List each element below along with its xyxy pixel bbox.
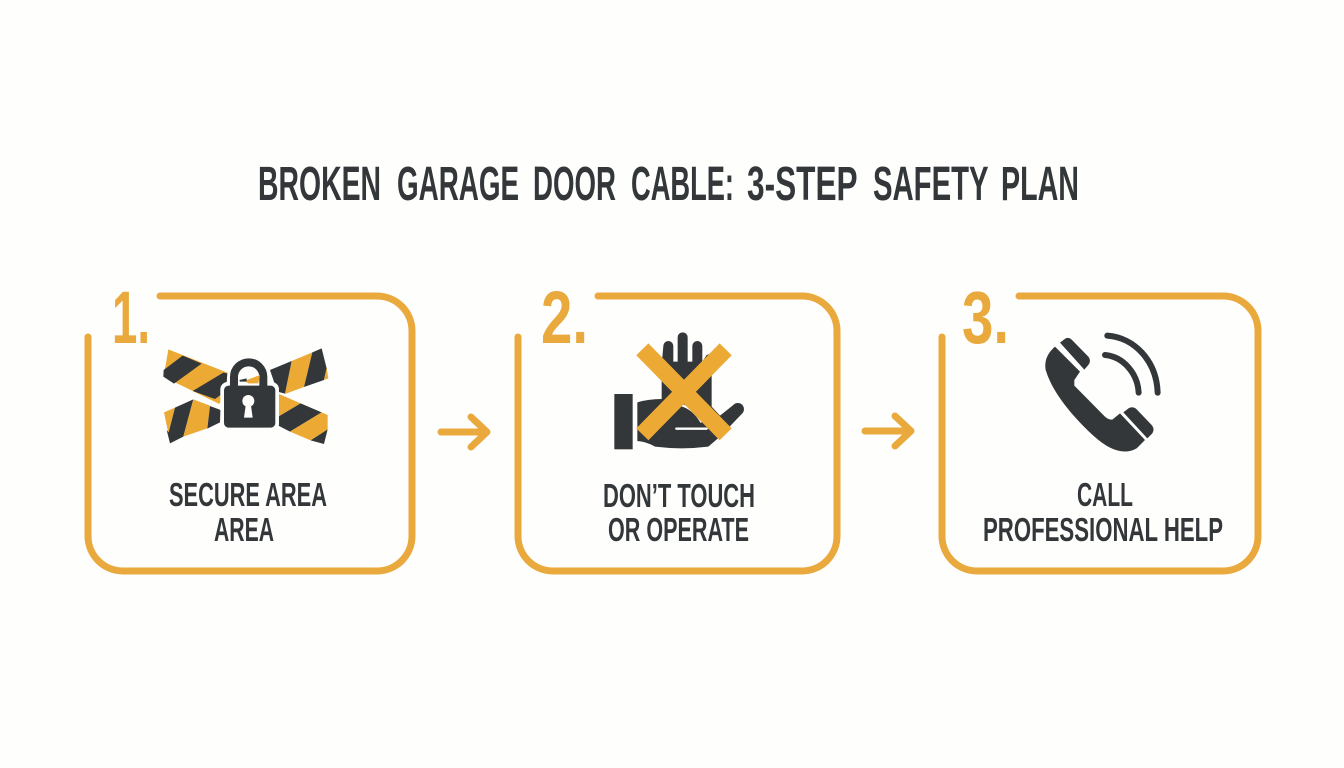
step 3 label: CALL — [1077, 477, 1133, 514]
title: SAFETY — [873, 157, 988, 211]
step 1 frame — [88, 296, 412, 571]
step 2 number: 2. — [541, 276, 588, 359]
icon: crossed-out hand — [614, 332, 744, 449]
step 2 frame — [518, 296, 837, 571]
panel: step 3 call professional help — [942, 276, 1258, 571]
icon: phone with signal waves — [1045, 336, 1158, 451]
step 3 label second line: PROFESSIONAL HELP — [983, 512, 1223, 549]
title: GARAGE — [397, 157, 519, 211]
step 1 label second line: AREA — [214, 512, 274, 549]
title: BROKEN — [258, 157, 381, 211]
title: DOOR — [533, 157, 616, 211]
panel: step 1 secure area — [88, 276, 412, 571]
step 3 number: 3. — [962, 276, 1009, 359]
step 1 label: SECURE AREA — [169, 477, 327, 514]
icon: caution tape and padlock — [163, 348, 328, 444]
arrow: step 2 to step 3 — [865, 416, 911, 446]
arrow: step 1 to step 2 — [441, 417, 487, 447]
step 2 label: DON’T TOUCH — [603, 478, 755, 515]
step 3 frame — [942, 296, 1258, 571]
title: 3-STEP — [747, 157, 857, 211]
title: PLAN — [1001, 157, 1079, 211]
step 1 number: 1. — [112, 276, 150, 359]
step 2 label second line: OR OPERATE — [608, 512, 749, 549]
title: CABLE: — [631, 157, 734, 211]
panel: step 2 do not touch — [518, 276, 837, 571]
